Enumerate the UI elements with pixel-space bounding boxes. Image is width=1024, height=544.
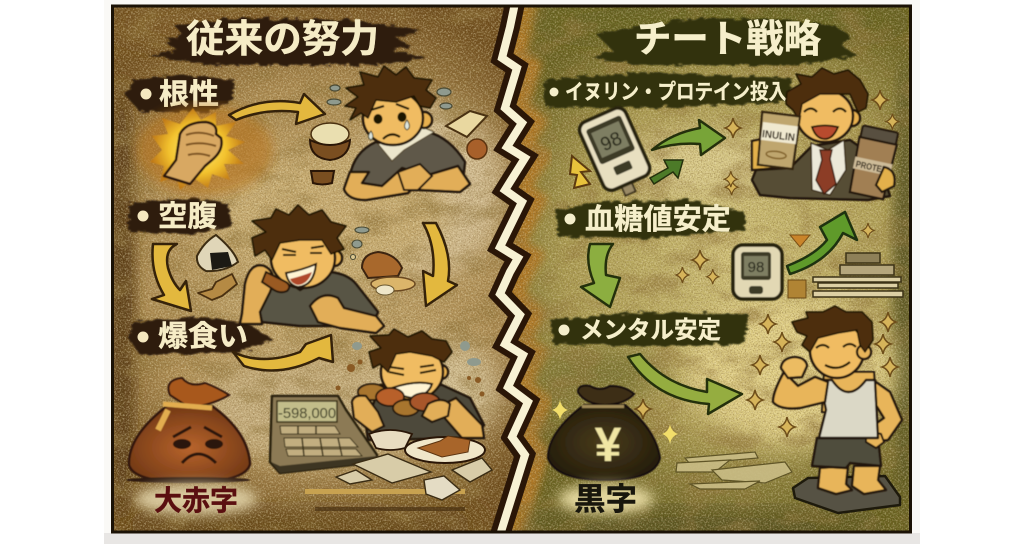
arrow: 爆食い to man xyxy=(233,335,333,370)
icon: small dish xyxy=(311,171,334,184)
icon: glowing fist xyxy=(137,105,273,195)
arrow: meter to businessman xyxy=(652,120,725,155)
icon: sparkles top xyxy=(724,90,899,195)
title: left xyxy=(148,18,426,65)
label: 黒字: 黒字 xyxy=(574,482,637,517)
icon: deficit money bag xyxy=(126,378,250,483)
label: 大赤字: 大赤字 xyxy=(154,485,238,516)
product: protein tub xyxy=(848,125,899,200)
icon: sparkles lower xyxy=(552,312,898,444)
title: left: 従来の努力 xyxy=(186,19,379,61)
character: businessman xyxy=(752,68,899,200)
arrow: 根性 to man xyxy=(229,94,325,124)
icon: receipts xyxy=(336,454,492,500)
arrow: green down xyxy=(581,244,620,307)
icon: chicken plate xyxy=(405,436,485,463)
label: 爆食い xyxy=(128,317,274,355)
icon: wrapped candy xyxy=(198,274,237,300)
icon: calculator xyxy=(270,396,377,473)
crack divider xyxy=(500,3,528,535)
icon: food plate xyxy=(371,277,415,295)
arrow: mental to character xyxy=(628,354,742,414)
label: 爆食い: 爆食い xyxy=(158,320,248,353)
calculator display: -598,000 xyxy=(278,405,336,422)
label: 空腹: 空腹 xyxy=(158,200,217,233)
icon: bread xyxy=(362,252,402,278)
label: 血糖値安定: 血糖値安定 xyxy=(585,203,731,236)
label: 黒字 xyxy=(558,482,654,517)
icon: old papers xyxy=(676,452,792,489)
arrow: right curved down xyxy=(423,223,457,306)
icon: bathroom scale xyxy=(793,476,900,513)
arrow: left curved down xyxy=(152,244,191,311)
label: 空腹 xyxy=(128,198,232,235)
arrow: green up xyxy=(787,212,857,274)
label: イヌリン・プロテイン投入 xyxy=(543,72,792,108)
panel: left background xyxy=(108,5,521,539)
icon: table xyxy=(305,489,465,511)
frame xyxy=(112,6,910,532)
icon: glucose meter tilted xyxy=(577,105,657,202)
icon: lightning bolt xyxy=(570,156,590,188)
label: イヌリン・プロテイン投入: イヌリン・プロテイン投入 xyxy=(565,81,787,104)
label: 根性: 根性 xyxy=(159,78,219,111)
icon: stack of papers xyxy=(813,253,903,297)
icon: glucose meter upright: 98 xyxy=(748,259,764,276)
icon: crumbs and drops xyxy=(350,227,369,260)
icon: nut xyxy=(467,139,487,159)
bottom scan strip xyxy=(104,533,920,544)
scan margin xyxy=(104,0,920,544)
icon: rice ball xyxy=(197,235,238,271)
icon: tofu block xyxy=(446,111,487,137)
label: メンタル安定 xyxy=(551,312,748,346)
icon: small box xyxy=(788,280,806,298)
product: inulin pack xyxy=(756,112,800,169)
icon: glucose meter tilted: 98 xyxy=(598,128,625,156)
icon: sweat drops xyxy=(327,85,452,109)
title: right xyxy=(593,18,858,65)
panel: right background xyxy=(495,0,917,539)
character: overeating man xyxy=(352,329,484,440)
label: 根性 xyxy=(126,75,234,112)
character: eating man xyxy=(240,205,384,333)
yen mark: ¥ xyxy=(595,419,622,472)
title: right: チート戦略 xyxy=(634,19,821,61)
arrow: small up xyxy=(650,160,683,184)
icon: sparkles middle xyxy=(676,223,874,284)
product: protein tub: PROTEIN xyxy=(855,159,890,176)
product: inulin pack: INULIN xyxy=(761,128,796,144)
icon: rice bowl xyxy=(310,123,350,160)
icon: surplus money bag xyxy=(548,386,660,480)
label: 大赤字 xyxy=(134,483,258,516)
icon: rice bowl on table xyxy=(369,430,412,450)
label: メンタル安定: メンタル安定 xyxy=(580,317,721,344)
character: muscular man xyxy=(773,306,902,494)
label: 血糖値安定 xyxy=(556,200,745,238)
icon: crumbs xyxy=(336,341,484,396)
icon: glucose meter upright xyxy=(733,245,782,299)
character: worried man xyxy=(344,66,470,200)
icon: orange triangle xyxy=(790,235,810,247)
